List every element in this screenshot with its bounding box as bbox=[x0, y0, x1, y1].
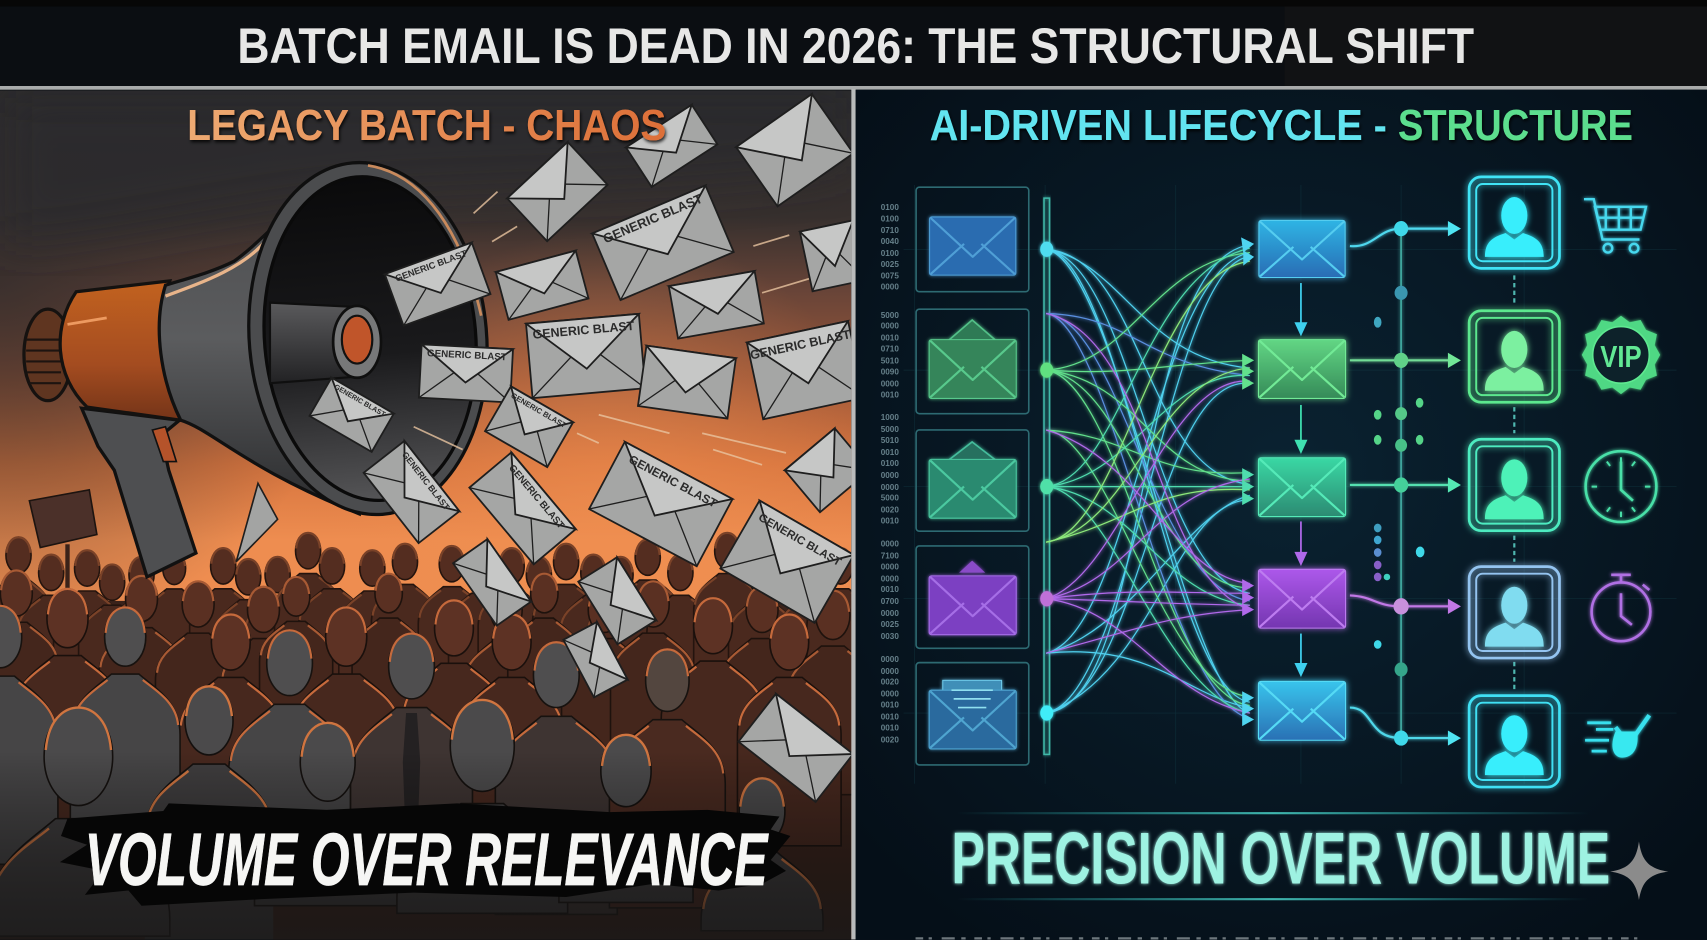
panel: legacy batch chaos bbox=[0, 90, 879, 939]
binary columns: 0100 bbox=[881, 459, 899, 468]
speed streaks bbox=[414, 192, 827, 465]
banner: brush stroke bbox=[60, 803, 790, 906]
binary columns: 0000 bbox=[881, 667, 899, 676]
binary columns: 0000 bbox=[881, 283, 899, 292]
panel: ai-driven lifecycle bbox=[856, 90, 1707, 940]
icon: sparkle bbox=[1610, 841, 1668, 900]
rule top bbox=[957, 812, 1588, 814]
icon: cart bbox=[1584, 199, 1646, 253]
binary columns bbox=[881, 203, 899, 744]
binary columns: 0000 bbox=[881, 539, 899, 548]
envelopes: generic blast: GENERIC BLAST bbox=[626, 452, 720, 511]
heading: legacy batch: LEGACY BATCH - CHAOS bbox=[187, 102, 666, 150]
binary columns: 5000 bbox=[881, 311, 899, 320]
envelopes: generic blast: GENERIC BLAST bbox=[756, 512, 843, 569]
center divider bbox=[851, 89, 856, 939]
envelopes: generic blast: GENERIC BLAST bbox=[509, 391, 568, 430]
placard bbox=[29, 490, 97, 588]
down arrows bbox=[1294, 283, 1307, 677]
icon: stopwatch bbox=[1592, 575, 1650, 641]
binary columns: 0075 bbox=[881, 272, 899, 281]
cut-off caption bbox=[916, 937, 1643, 939]
flow curves bbox=[1046, 245, 1250, 718]
binary columns: 0040 bbox=[881, 237, 899, 246]
binary columns: 0100 bbox=[881, 203, 899, 212]
binary columns: 0025 bbox=[881, 620, 899, 629]
target envelopes bbox=[1258, 220, 1346, 740]
icon: fast check bbox=[1585, 715, 1649, 758]
binary columns: 0010 bbox=[881, 701, 899, 710]
binary columns: 0000 bbox=[881, 379, 899, 388]
binary columns: 1000 bbox=[881, 413, 899, 422]
envelopes: generic blast: GENERIC BLAST bbox=[506, 463, 566, 531]
binary columns: 0000 bbox=[881, 690, 899, 699]
binary columns: 0000 bbox=[881, 483, 899, 492]
envelopes: generic blast: GENERIC BLAST bbox=[532, 319, 635, 342]
binary columns: 0710 bbox=[881, 226, 899, 235]
binary columns: 0025 bbox=[881, 260, 899, 269]
binary columns: 0000 bbox=[881, 471, 899, 480]
envelopes: generic blast: GENERIC BLAST bbox=[601, 191, 705, 246]
heading: ai-driven lifecycle: AI-DRIVEN LIFECYCLE - bbox=[930, 102, 1398, 150]
binary columns: 0010 bbox=[881, 723, 899, 732]
panel background bbox=[0, 90, 851, 939]
binary columns: 5000 bbox=[881, 425, 899, 434]
binary columns: 0000 bbox=[881, 562, 899, 571]
binary columns: 0090 bbox=[881, 367, 899, 376]
icon: vip badge: VIP bbox=[1600, 340, 1642, 374]
binary columns: 0100 bbox=[881, 215, 899, 224]
envelopes: generic blast: GENERIC BLAST bbox=[394, 248, 469, 284]
grid bbox=[904, 185, 1677, 784]
flow arrowheads bbox=[1241, 237, 1254, 726]
heading: ai-driven lifecycle: STRUCTURE bbox=[1398, 102, 1633, 150]
binary columns: 0030 bbox=[881, 632, 899, 641]
output arrowheads and nodes bbox=[1393, 221, 1461, 746]
binary columns: 0000 bbox=[881, 322, 899, 331]
icon: vip badge bbox=[1582, 316, 1660, 394]
bus line bbox=[1044, 198, 1049, 754]
envelopes: generic blast: GENERIC BLAST bbox=[400, 450, 452, 512]
binary columns: 0000 bbox=[881, 655, 899, 664]
header band bbox=[0, 0, 1707, 90]
bus nodes bbox=[1040, 242, 1053, 721]
dashed links between profiles bbox=[1513, 275, 1515, 690]
binary columns: 0710 bbox=[881, 345, 899, 354]
title: BATCH EMAIL IS DEAD IN 2026: THE STRUCTURAL SHIFT bbox=[237, 18, 1474, 74]
binary columns: 0000 bbox=[881, 609, 899, 618]
binary columns: 0010 bbox=[881, 334, 899, 343]
icon: clock bbox=[1586, 451, 1656, 522]
crowd bbox=[0, 533, 879, 939]
binary columns: 0100 bbox=[881, 249, 899, 258]
output connectors bbox=[1350, 229, 1450, 738]
profile cards bbox=[1469, 177, 1559, 787]
megaphone handle bbox=[82, 408, 196, 577]
envelopes: generic blast: GENERIC BLAST bbox=[333, 384, 387, 419]
status dots bbox=[1374, 317, 1424, 649]
binary columns: 0010 bbox=[881, 517, 899, 526]
binary columns: 0000 bbox=[881, 574, 899, 583]
binary columns: 5010 bbox=[881, 436, 899, 445]
envelopes: generic blast: GENERIC BLAST bbox=[427, 348, 507, 363]
envelopes: generic blast: GENERIC BLAST bbox=[749, 327, 852, 362]
slogan: volume over relevance: VOLUME OVER RELEVANCE bbox=[85, 818, 769, 901]
source boxes bbox=[916, 187, 1029, 765]
binary columns: 0010 bbox=[881, 713, 899, 722]
binary columns: 0010 bbox=[881, 448, 899, 457]
megaphone bbox=[24, 153, 502, 577]
rule bottom bbox=[957, 898, 1588, 900]
binary columns: 0010 bbox=[881, 390, 899, 399]
envelopes: generic blast bbox=[236, 94, 870, 802]
binary columns: 0020 bbox=[881, 678, 899, 687]
binary columns: 0700 bbox=[881, 597, 899, 606]
binary columns: 0010 bbox=[881, 585, 899, 594]
binary columns: 0020 bbox=[881, 506, 899, 515]
source envelopes bbox=[929, 217, 1016, 749]
binary columns: 5010 bbox=[881, 357, 899, 366]
binary columns: 7100 bbox=[881, 551, 899, 560]
binary columns: 5000 bbox=[881, 494, 899, 503]
binary columns: 0020 bbox=[881, 735, 899, 744]
